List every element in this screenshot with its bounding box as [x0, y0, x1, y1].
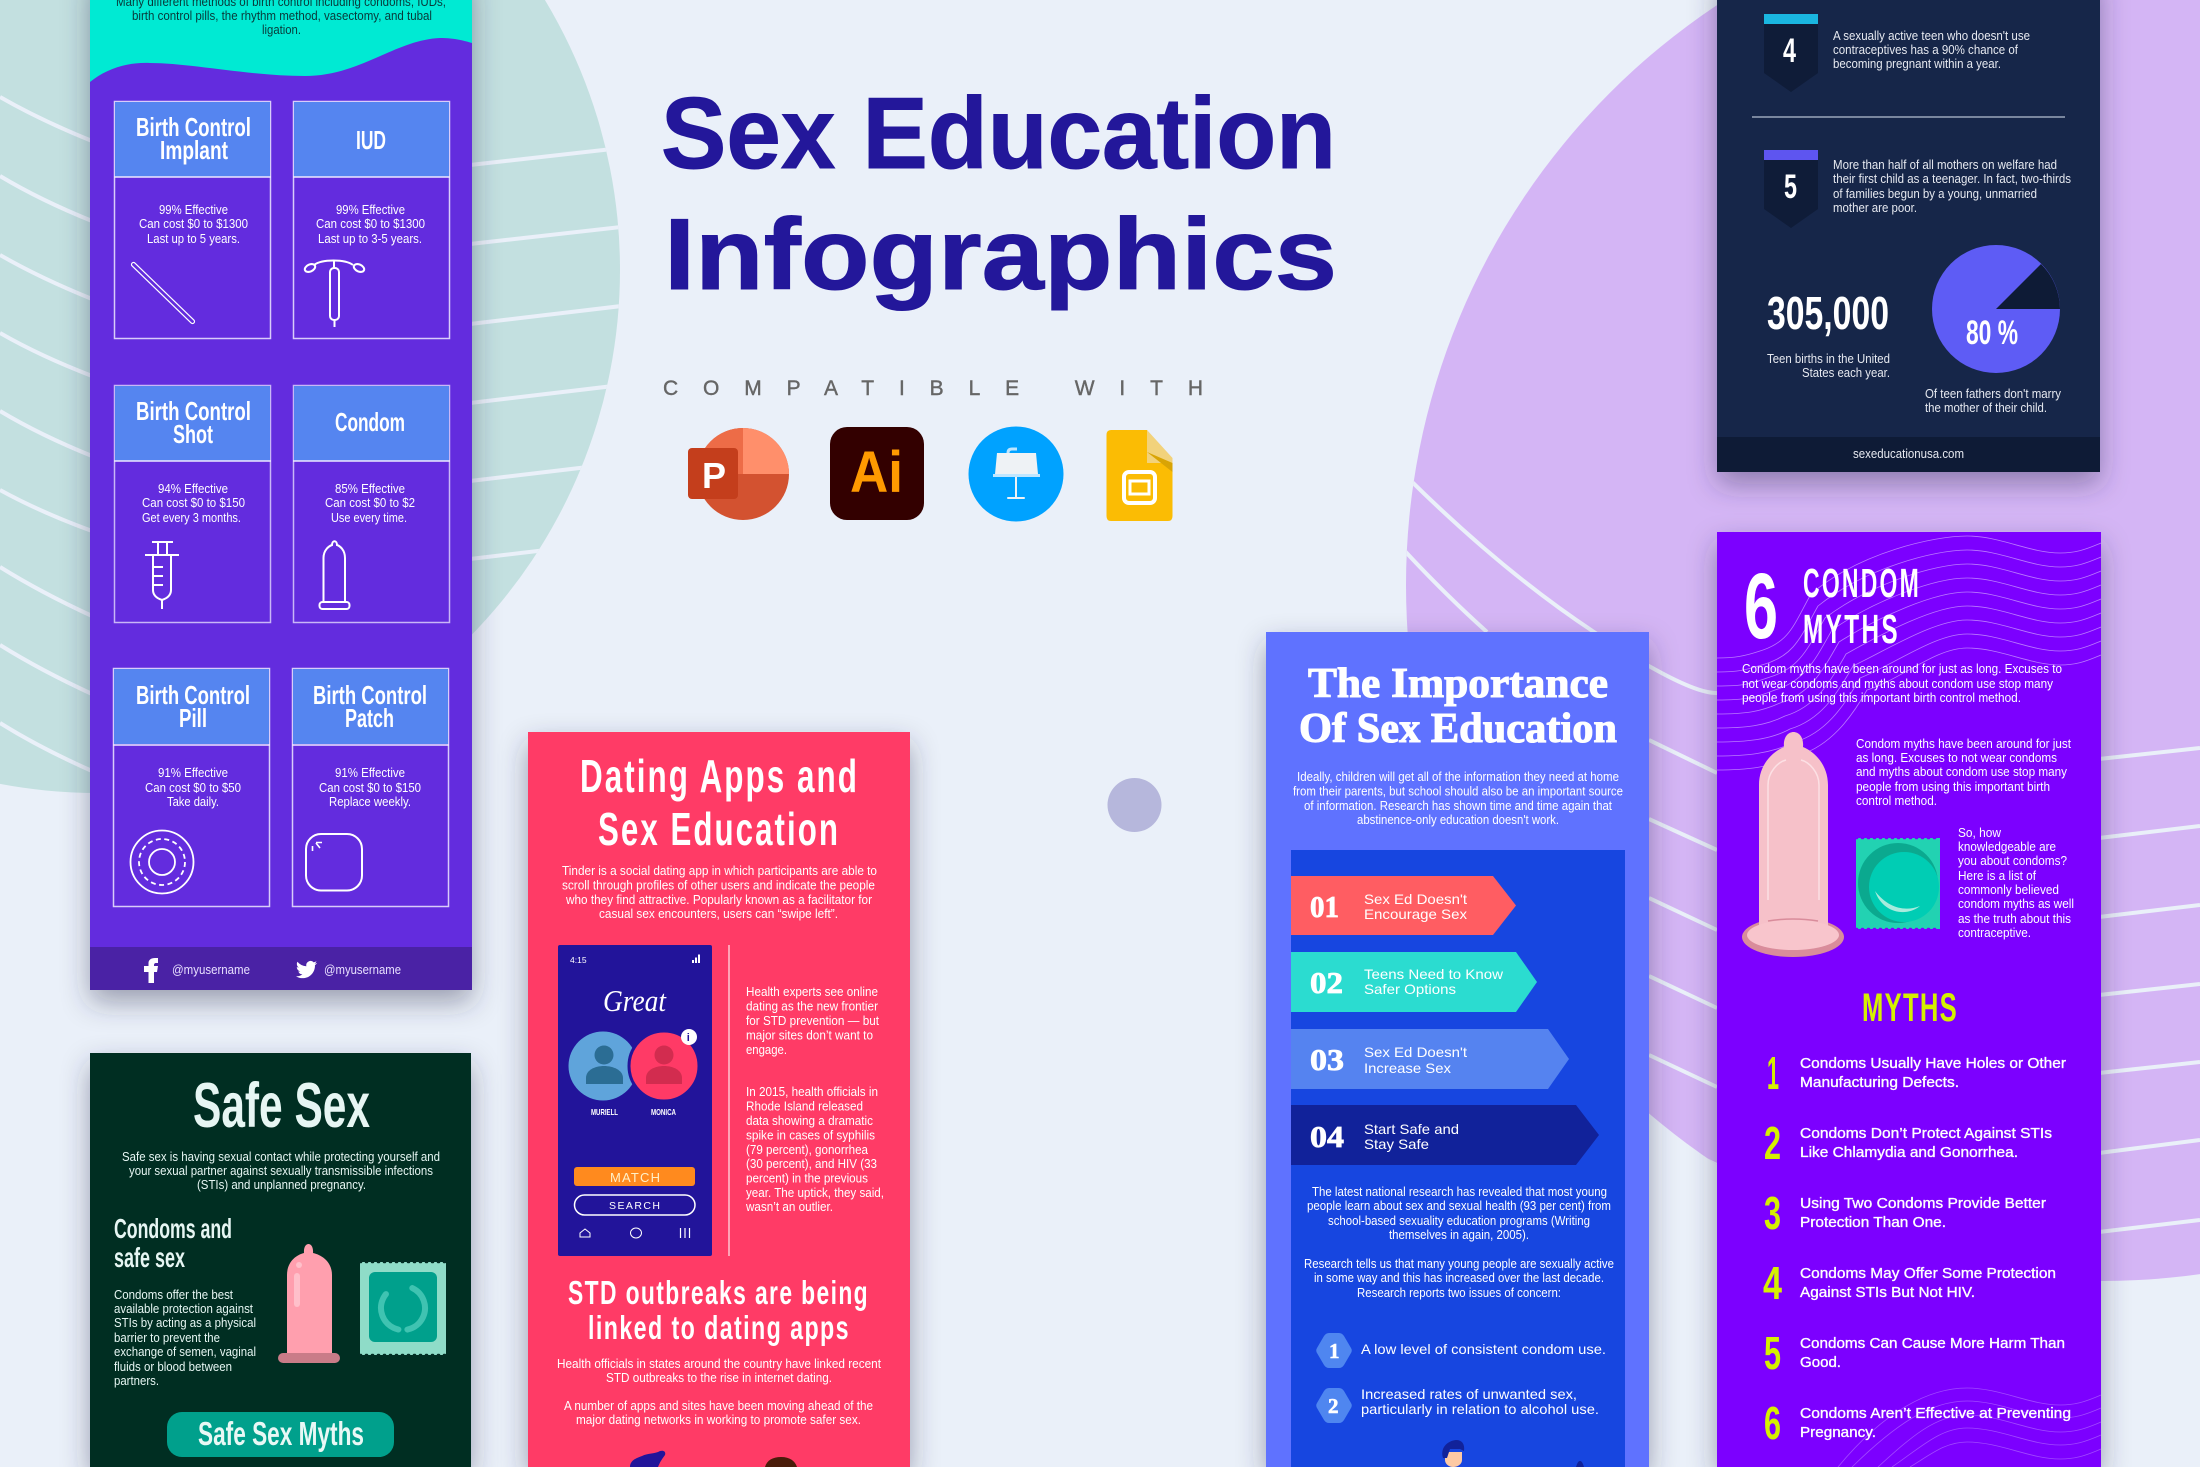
phone mockup	[558, 945, 712, 1256]
myth 3: 3	[1764, 1187, 1781, 1239]
arrow 03: Sex Ed Doesn't	[1364, 1044, 1467, 1060]
intro text	[1293, 770, 1623, 827]
heading: MYTHS	[1803, 606, 1900, 652]
panel: birth control methods	[90, 0, 472, 990]
intro text: abstinence-only education doesn't work.	[1357, 813, 1559, 827]
title	[661, 78, 1337, 311]
badge 5: 5	[1784, 168, 1797, 206]
issue 2	[1316, 1386, 1599, 1423]
fact 5 text: More than half of all mothers on welfare had	[1833, 158, 2057, 172]
pie chart: 80 percent: Of teen fathers don't marry	[1925, 387, 2062, 401]
panel: teen pregnancy statistics	[1717, 0, 2100, 472]
side text: Rhode Island released	[746, 1100, 863, 1114]
side text: dating as the new frontier	[746, 1000, 878, 1014]
myth 1	[1767, 1047, 2066, 1099]
card: IUD: IUD	[356, 125, 386, 155]
closing text: Health officials in states around the country have linked recent	[557, 1357, 881, 1371]
heading: Dating Apps and	[580, 750, 859, 802]
inner blue panel	[1291, 850, 1625, 1467]
research text: school-based sexuality education programs (Writing	[1328, 1214, 1590, 1228]
issue 1: 1	[1329, 1339, 1340, 1363]
phone mockup: MURIELL	[591, 1107, 618, 1117]
pie chart: 80 percent	[1925, 245, 2062, 415]
icon: large condom	[1742, 732, 1844, 957]
card: pill: Can cost $0 to $50	[145, 781, 241, 795]
statistic: 305,000	[1767, 287, 1890, 380]
intro text: people from using this important birth control method.	[1742, 691, 2021, 705]
subheading: linked to dating apps	[588, 1309, 850, 1346]
issue 2: Increased rates of unwanted sex,	[1361, 1386, 1577, 1402]
side text: In 2015, health officials in	[746, 1085, 878, 1099]
myth 4: Against STIs But Not HIV.	[1800, 1285, 1975, 1301]
avatar: Monica: i	[687, 1032, 690, 1044]
body text: condom myths: as long. Excuses to not wear condoms	[1856, 751, 2057, 765]
closing text: major dating networks in working to promote safer sex.	[576, 1413, 861, 1427]
card: IUD: Last up to 3-5 years.	[318, 232, 422, 246]
heading	[580, 750, 859, 855]
issue 1: A low level of consistent condom use.	[1361, 1341, 1606, 1357]
card: patch: Replace weekly.	[329, 795, 411, 809]
heading: Sex Education	[598, 803, 840, 855]
myth 4	[1763, 1257, 2056, 1309]
subheading: STD outbreaks are being	[568, 1274, 869, 1311]
card: IUD: Can cost $0 to $1300	[316, 217, 425, 231]
fact 5 text: mother are poor.	[1833, 201, 1917, 215]
side text: major sites don’t want to	[746, 1028, 873, 1042]
body text: STIs by acting as a physical	[114, 1316, 256, 1330]
intro text: casual sex encounters, users can “swipe left”.	[599, 907, 838, 921]
intro text: Ideally, children will get all of the information they need at home	[1297, 770, 1619, 784]
arrow 01	[1291, 876, 1516, 935]
button: safe sex myths: Safe Sex Myths	[198, 1415, 364, 1452]
phone mockup: Great	[603, 983, 667, 1018]
card: implant: Birth Control	[136, 112, 251, 142]
heading: Of Sex Education	[1299, 706, 1617, 752]
subheading	[114, 1213, 232, 1273]
icon: Google Slides	[1106, 430, 1172, 521]
card: IUD: 99% Effective	[336, 203, 405, 217]
myth 5: 5	[1764, 1327, 1781, 1379]
avatar: Muriell	[568, 1032, 638, 1100]
side text: Health experts see online	[746, 985, 878, 999]
myth 5	[1764, 1327, 2065, 1379]
footer with social handles	[90, 947, 472, 990]
icon: Illustrator: Ai	[850, 440, 903, 505]
icon: condom	[278, 1244, 340, 1363]
intro text: from their parents, but school should also be an important source	[1293, 784, 1623, 798]
subheading	[568, 1274, 869, 1346]
panel: importance of sex education	[1266, 632, 1649, 1467]
panel: safe sex	[90, 1053, 471, 1467]
phone mockup: MATCH	[610, 1170, 660, 1185]
icon: condom packet	[1856, 838, 1940, 929]
intro text: who they find attractive. Popularly known as a facilitator for	[565, 893, 872, 907]
issue 2: 2	[1328, 1394, 1338, 1418]
body text: how knowledgeable: commonly believed	[1958, 883, 2059, 897]
card: condom: 85% Effective	[335, 482, 405, 496]
myth 3: Protection Than One.	[1800, 1215, 1946, 1231]
card: implant: Last up to 5 years.	[147, 232, 240, 246]
intro text: ligation.	[262, 23, 301, 37]
card: IUD	[293, 102, 450, 338]
footer: sexeducationusa.com	[1853, 447, 1964, 461]
side text	[745, 985, 884, 1214]
intro text: birth control pills, the rhythm method, vasectomy, and tubal	[132, 9, 432, 23]
intro text: Safe sex is having sexual contact while protecting yourself and	[122, 1150, 440, 1164]
myth 4: 4	[1763, 1257, 1782, 1309]
arrow 02	[1291, 952, 1537, 1012]
phone mockup: SEARCH	[609, 1200, 660, 1212]
myth 1: Condoms Usually Have Holes or Other	[1800, 1056, 2066, 1072]
subheading: safe sex	[114, 1242, 185, 1273]
body text: condom myths	[1856, 737, 2071, 808]
card: shot: Birth Control	[136, 396, 251, 426]
footer	[1717, 437, 2100, 472]
statistic: 305,000: 305,000	[1767, 287, 1889, 339]
figures: people at bottom	[1442, 1440, 1584, 1467]
fact 4 text: becoming pregnant within a year.	[1833, 57, 2001, 71]
myth 6: 6	[1764, 1397, 1781, 1449]
heading: Safe Sex	[193, 1071, 370, 1141]
body text: barrier to prevent the	[114, 1331, 220, 1345]
card: shot: Shot	[173, 419, 213, 449]
avatar: Monica	[629, 1029, 699, 1101]
research text: Research reports two issues of concern:	[1357, 1286, 1561, 1300]
myth 5: Good.	[1800, 1355, 1841, 1371]
intro text	[562, 864, 877, 921]
decorative dot	[1108, 778, 1162, 832]
fact 5 text: their first child as a teenager. In fact, two-thirds	[1833, 172, 2071, 186]
side text: percent) in the previous	[746, 1172, 868, 1186]
card: patch: Can cost $0 to $150	[319, 781, 421, 795]
card: pill	[113, 668, 270, 906]
wavy line pattern	[1717, 536, 2101, 1467]
body text: condom myths: control method.	[1856, 794, 1937, 808]
phone mockup: 4:15	[570, 955, 587, 965]
side text: wasn’t an outlier.	[745, 1200, 833, 1214]
intro text: scroll through profiles of other users and indicate the people	[562, 878, 875, 892]
heading	[1744, 554, 1921, 658]
card: implant: Implant	[160, 135, 228, 165]
myth 3	[1764, 1187, 2046, 1239]
statistic: 305,000: States each year.	[1802, 366, 1890, 380]
research text: in some way and this has increased over the last decade.	[1314, 1271, 1604, 1285]
myth 6: Pregnancy.	[1800, 1425, 1876, 1441]
card: pill: Take daily.	[167, 795, 219, 809]
card: patch: Patch	[345, 703, 394, 733]
icon: Illustrator	[830, 427, 924, 520]
fact 5 text	[1833, 158, 2071, 215]
closing text: A number of apps and sites have been moving ahead of the	[564, 1399, 873, 1413]
myth 5: Condoms Can Cause More Harm Than	[1800, 1336, 2065, 1352]
intro text	[1742, 662, 2062, 705]
myth 6	[1764, 1397, 2071, 1449]
icon: PowerPoint: P	[702, 455, 726, 496]
background: purple circle with arcs	[1390, 0, 2200, 1281]
research text: themselves in again, 2005).	[1389, 1228, 1529, 1242]
intro text: (STIs) and unplanned pregnancy.	[197, 1178, 366, 1192]
card: implant: 99% Effective	[159, 203, 228, 217]
card: shot: 94% Effective	[158, 482, 228, 496]
myth 2: 2	[1764, 1117, 1781, 1169]
intro text: Tinder is a social dating app in which participants are able to	[562, 864, 877, 878]
closing text: STD outbreaks to the rise in internet dating.	[606, 1371, 832, 1385]
purple wave background	[90, 38, 472, 990]
arrow 02: Safer Options	[1364, 981, 1456, 997]
heading: The Importance	[1308, 661, 1608, 707]
arrow 04	[1291, 1105, 1599, 1165]
arrow 02: 02	[1310, 965, 1343, 1000]
body text: how knowledgeable: So, how	[1958, 826, 2002, 840]
body text: Condoms offer the best	[114, 1288, 233, 1302]
myth 1: Manufacturing Defects.	[1800, 1075, 1959, 1091]
card: patch: 91% Effective	[335, 766, 405, 780]
title: Sex Education	[661, 78, 1336, 190]
card: pill: 91% Effective	[158, 766, 228, 780]
side text: engage.	[746, 1043, 787, 1057]
card: patch: Birth Control	[313, 680, 427, 710]
body text: partners.	[114, 1374, 159, 1388]
body text: how knowledgeable	[1958, 826, 2074, 940]
intro text: not wear condoms and myths about condom use stop many	[1742, 677, 2054, 691]
body text: fluids or blood between	[114, 1360, 232, 1374]
pie chart: 80 percent: 80 %	[1966, 314, 2018, 352]
compatible with label: COMPATIBLE WITH	[663, 377, 1203, 400]
card: condom: Condom	[335, 407, 405, 437]
badge 4: 4	[1783, 32, 1796, 70]
subheading: Condoms and	[114, 1213, 232, 1244]
footer with social handles: @myusername	[324, 963, 401, 977]
arrow 04: Stay Safe	[1364, 1136, 1429, 1152]
button: safe sex myths	[167, 1412, 394, 1457]
phone mockup: MONICA	[651, 1107, 676, 1117]
arrow 01: 01	[1310, 889, 1339, 924]
side text: data showing a dramatic	[746, 1114, 873, 1128]
fact 4 text: A sexually active teen who doesn't use	[1833, 29, 2030, 43]
title: Infographics	[664, 199, 1337, 311]
card: patch	[292, 668, 449, 906]
research text: The latest national research has revealed that most young	[1312, 1185, 1607, 1199]
body text: condom myths: and myths about condom use stop many	[1856, 765, 2068, 779]
fact 5 text: of families begun by a young, unmarried	[1833, 187, 2037, 201]
research text: Research tells us that many young people are sexually active	[1304, 1257, 1614, 1271]
side text: year. The uptick, they said,	[746, 1186, 884, 1200]
side text: spike in cases of syphilis	[746, 1128, 875, 1142]
arrow 03	[1291, 1029, 1569, 1089]
side text: (79 percent), gonorrhea	[746, 1143, 868, 1157]
body text: how knowledgeable: knowledgeable are	[1958, 840, 2056, 854]
body text: exchange of semen, vaginal	[114, 1345, 256, 1359]
panel: condom myths	[1717, 532, 2101, 1467]
myths heading: MYTHS	[1862, 986, 1958, 1030]
side text: for STD prevention — but	[746, 1014, 879, 1028]
heading	[1299, 661, 1617, 752]
myth 2: Like Chlamydia and Gonorrhea.	[1800, 1145, 2018, 1161]
card: pill: Pill	[179, 703, 207, 733]
icon: PowerPoint	[688, 428, 789, 520]
body text: available protection against	[114, 1302, 253, 1316]
badge 4	[1764, 14, 1818, 92]
myth 1: 1	[1767, 1047, 1779, 1099]
intro text	[122, 1150, 440, 1192]
side text: (30 percent), and HIV (33	[746, 1157, 877, 1171]
arrow 01: Encourage Sex	[1364, 906, 1467, 922]
badge 5	[1764, 150, 1818, 228]
heading: CONDOM	[1803, 560, 1921, 606]
card: implant	[114, 102, 271, 338]
body text: how knowledgeable: Here is a list of	[1958, 869, 2036, 883]
body text	[114, 1288, 256, 1388]
card: shot: Can cost $0 to $150	[142, 496, 245, 510]
myth 4: Condoms May Offer Some Protection	[1800, 1266, 2056, 1282]
arrow 01: Sex Ed Doesn't	[1364, 891, 1467, 907]
arrow 03: 03	[1310, 1042, 1344, 1077]
figures: heads at bottom	[630, 1451, 797, 1467]
arrow 04: 04	[1310, 1119, 1344, 1154]
body text: condom myths: Condom myths have been around for just	[1856, 737, 2071, 751]
card: shot	[114, 386, 271, 622]
research text: people learn about sex and sexual health (93 per cent) from	[1307, 1199, 1611, 1213]
background: teal circle with arcs	[0, 0, 630, 793]
body text: how knowledgeable: condom myths as well	[1958, 897, 2074, 911]
heading: 6	[1744, 554, 1778, 658]
myth 6: Condoms Aren’t Effective at Preventing	[1800, 1406, 2071, 1422]
card: condom: Can cost $0 to $2	[325, 496, 415, 510]
card: implant: Can cost $0 to $1300	[139, 217, 248, 231]
arrow 02: Teens Need to Know	[1364, 966, 1504, 982]
intro text: Condom myths have been around for just as long. Excuses to	[1742, 662, 2062, 676]
icon: condom packet	[360, 1262, 446, 1355]
issue 2: particularly in relation to alcohol use.	[1361, 1401, 1599, 1417]
intro text: of information. Research has shown time and time again that	[1304, 799, 1612, 813]
body text: how knowledgeable: contraceptive.	[1958, 926, 2031, 940]
intro text	[116, 0, 446, 37]
icon: Keynote	[968, 426, 1064, 522]
intro text: your sexual partner against sexually transmissible infections	[129, 1164, 433, 1178]
fact 4 text	[1833, 29, 2030, 71]
panel: dating apps	[528, 732, 910, 1467]
card: condom	[293, 386, 450, 622]
card: shot: Get every 3 months.	[142, 511, 241, 525]
myth 3: Using Two Condoms Provide Better	[1800, 1196, 2046, 1212]
research text	[1304, 1185, 1614, 1300]
body text: how knowledgeable: as the truth about this	[1958, 912, 2071, 926]
divider	[728, 945, 730, 1256]
card: condom: Use every time.	[331, 511, 407, 525]
footer with social handles: @myusername	[172, 963, 250, 977]
myth 2	[1764, 1117, 2052, 1169]
issue 1	[1316, 1333, 1606, 1368]
body text: how knowledgeable: you about condoms?	[1958, 854, 2067, 868]
myth 2: Condoms Don’t Protect Against STIs	[1800, 1126, 2052, 1142]
arrow 04: Start Safe and	[1364, 1121, 1459, 1137]
fact 4 text: contraceptives has a 90% chance of	[1833, 43, 2018, 57]
body text: condom myths: people from using this important birth	[1856, 780, 2050, 794]
closing text	[557, 1357, 881, 1427]
statistic: 305,000: Teen births in the United	[1767, 352, 1890, 366]
pie chart: 80 percent: the mother of their child.	[1925, 401, 2047, 415]
card: pill: Birth Control	[136, 680, 250, 710]
arrow 03: Increase Sex	[1364, 1060, 1451, 1076]
